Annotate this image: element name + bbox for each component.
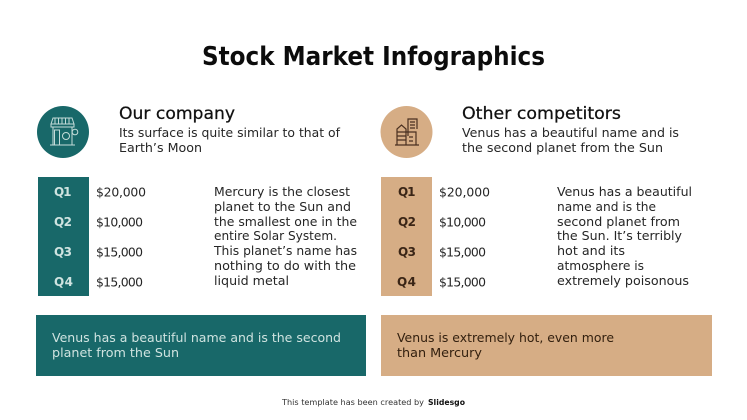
table: other competitors quarters: $15,000 [439,244,486,260]
table: our company quarters: Q1 [54,185,72,199]
text: mercury paragraph: nothing to do with the [214,258,356,273]
text: venus paragraph: extremely poisonous [557,273,689,288]
panel: our company [36,104,366,376]
table: our company quarters: Q3 [54,245,72,259]
table: other competitors quarters: Q1 [398,185,416,199]
text: venus paragraph [557,184,692,288]
text: mercury paragraph: Mercury is the closest [214,184,350,199]
text: mercury paragraph: This planet’s name has [213,243,357,258]
callout: other competitors: Venus is extremely hot, even more [397,330,614,345]
table: other competitors quarters: $10,000 [439,214,486,230]
icon: storefront [37,106,89,158]
text: venus paragraph: atmosphere is [557,258,644,273]
table: other competitors quarters: Q2 [398,215,416,229]
text: mercury paragraph: liquid metal [214,273,289,288]
table: our company quarters: $15,000 [96,244,143,260]
footer credit: Slidesgo [428,398,465,407]
text: our company description: Earth’s Moon [119,140,202,155]
table: our company quarters: $20,000 [96,184,146,200]
callout: our company: planet from the Sun [52,345,179,360]
table: our company quarters: Q2 [54,215,72,229]
table: other competitors quarters: Q4 [397,275,416,289]
text: venus paragraph: second planet from [557,214,680,229]
table: our company quarters [38,177,146,296]
text: other competitors description: the second planet from the Sun [462,140,663,155]
table: our company quarters: $10,000 [96,214,143,230]
heading: our company: Our company [119,104,235,123]
callout: our company: Venus has a beautiful name and is the second [52,330,341,345]
table: other competitors quarters: Q3 [398,245,416,259]
callout: other competitors: than Mercury [397,345,482,360]
title: Stock Market Infographics [202,42,545,72]
text: our company description: Its surface is quite similar to that of [119,125,341,140]
text: mercury paragraph: planet to the Sun and [214,199,351,214]
table: other competitors quarters: $15,000 [439,274,486,290]
text: mercury paragraph: entire Solar System. [214,228,337,243]
text: venus paragraph: hot and its [557,243,625,258]
heading: other competitors: Other competitors [462,104,621,123]
table: other competitors quarters: $20,000 [439,184,490,200]
text: venus paragraph: the Sun. It’s terribly [557,228,682,243]
text: other competitors description: Venus has a beautiful name and is [462,125,679,140]
table: other competitors quarters [381,177,490,296]
text: mercury paragraph [213,184,357,288]
table: our company quarters: $15,000 [96,274,143,290]
text: our company description [119,125,341,155]
text: venus paragraph: Venus has a beautiful [557,184,692,199]
text: venus paragraph: name and is the [557,199,656,214]
text: mercury paragraph: the smallest one in the [214,214,357,229]
icon: city buildings [380,106,432,158]
table: our company quarters: Q4 [54,275,73,289]
panel: other competitors [380,104,712,376]
callout: other competitors [381,315,712,376]
callout: our company [36,315,366,376]
text: other competitors description [462,125,679,155]
footer credit: This template has been created by [281,398,425,407]
